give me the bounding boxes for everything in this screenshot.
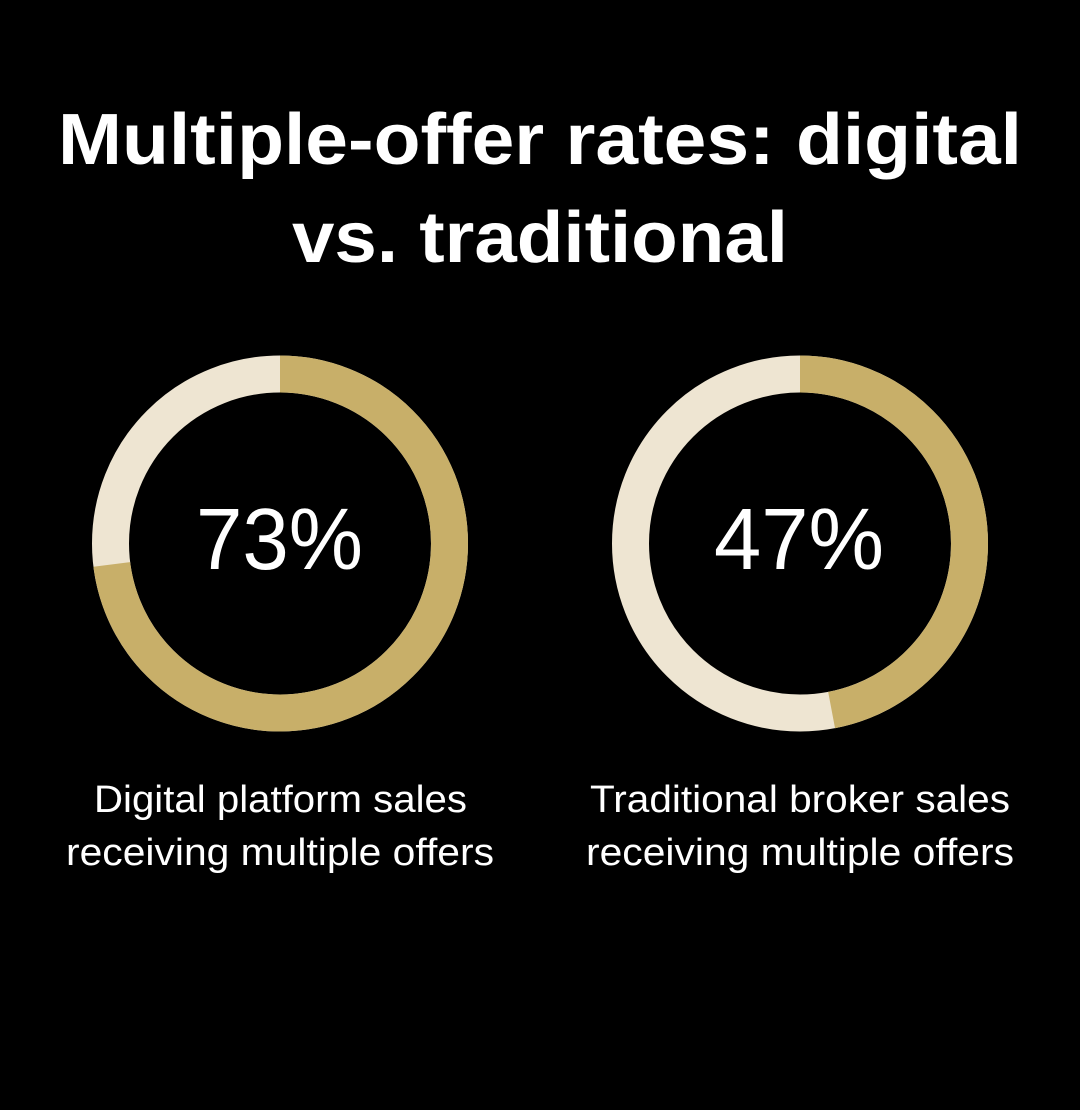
label: traditional: receiving multiple offers: [586, 832, 1014, 874]
value: 73%: 73%: [196, 491, 363, 588]
label: digital: Digital platform sales: [94, 779, 467, 821]
label: traditional: Traditional broker sales: [590, 779, 1010, 821]
title: vs. traditional: [292, 198, 788, 278]
donut: digital 73%: [110, 374, 450, 713]
label: traditional: [586, 779, 1014, 874]
value: 47%: 47%: [714, 491, 884, 588]
title: [58, 100, 1022, 278]
label: digital: receiving multiple offers: [66, 832, 494, 874]
donut: traditional 47%: [630, 374, 970, 713]
label: digital: [66, 779, 494, 874]
title: Multiple-offer rates: digital: [58, 100, 1022, 180]
